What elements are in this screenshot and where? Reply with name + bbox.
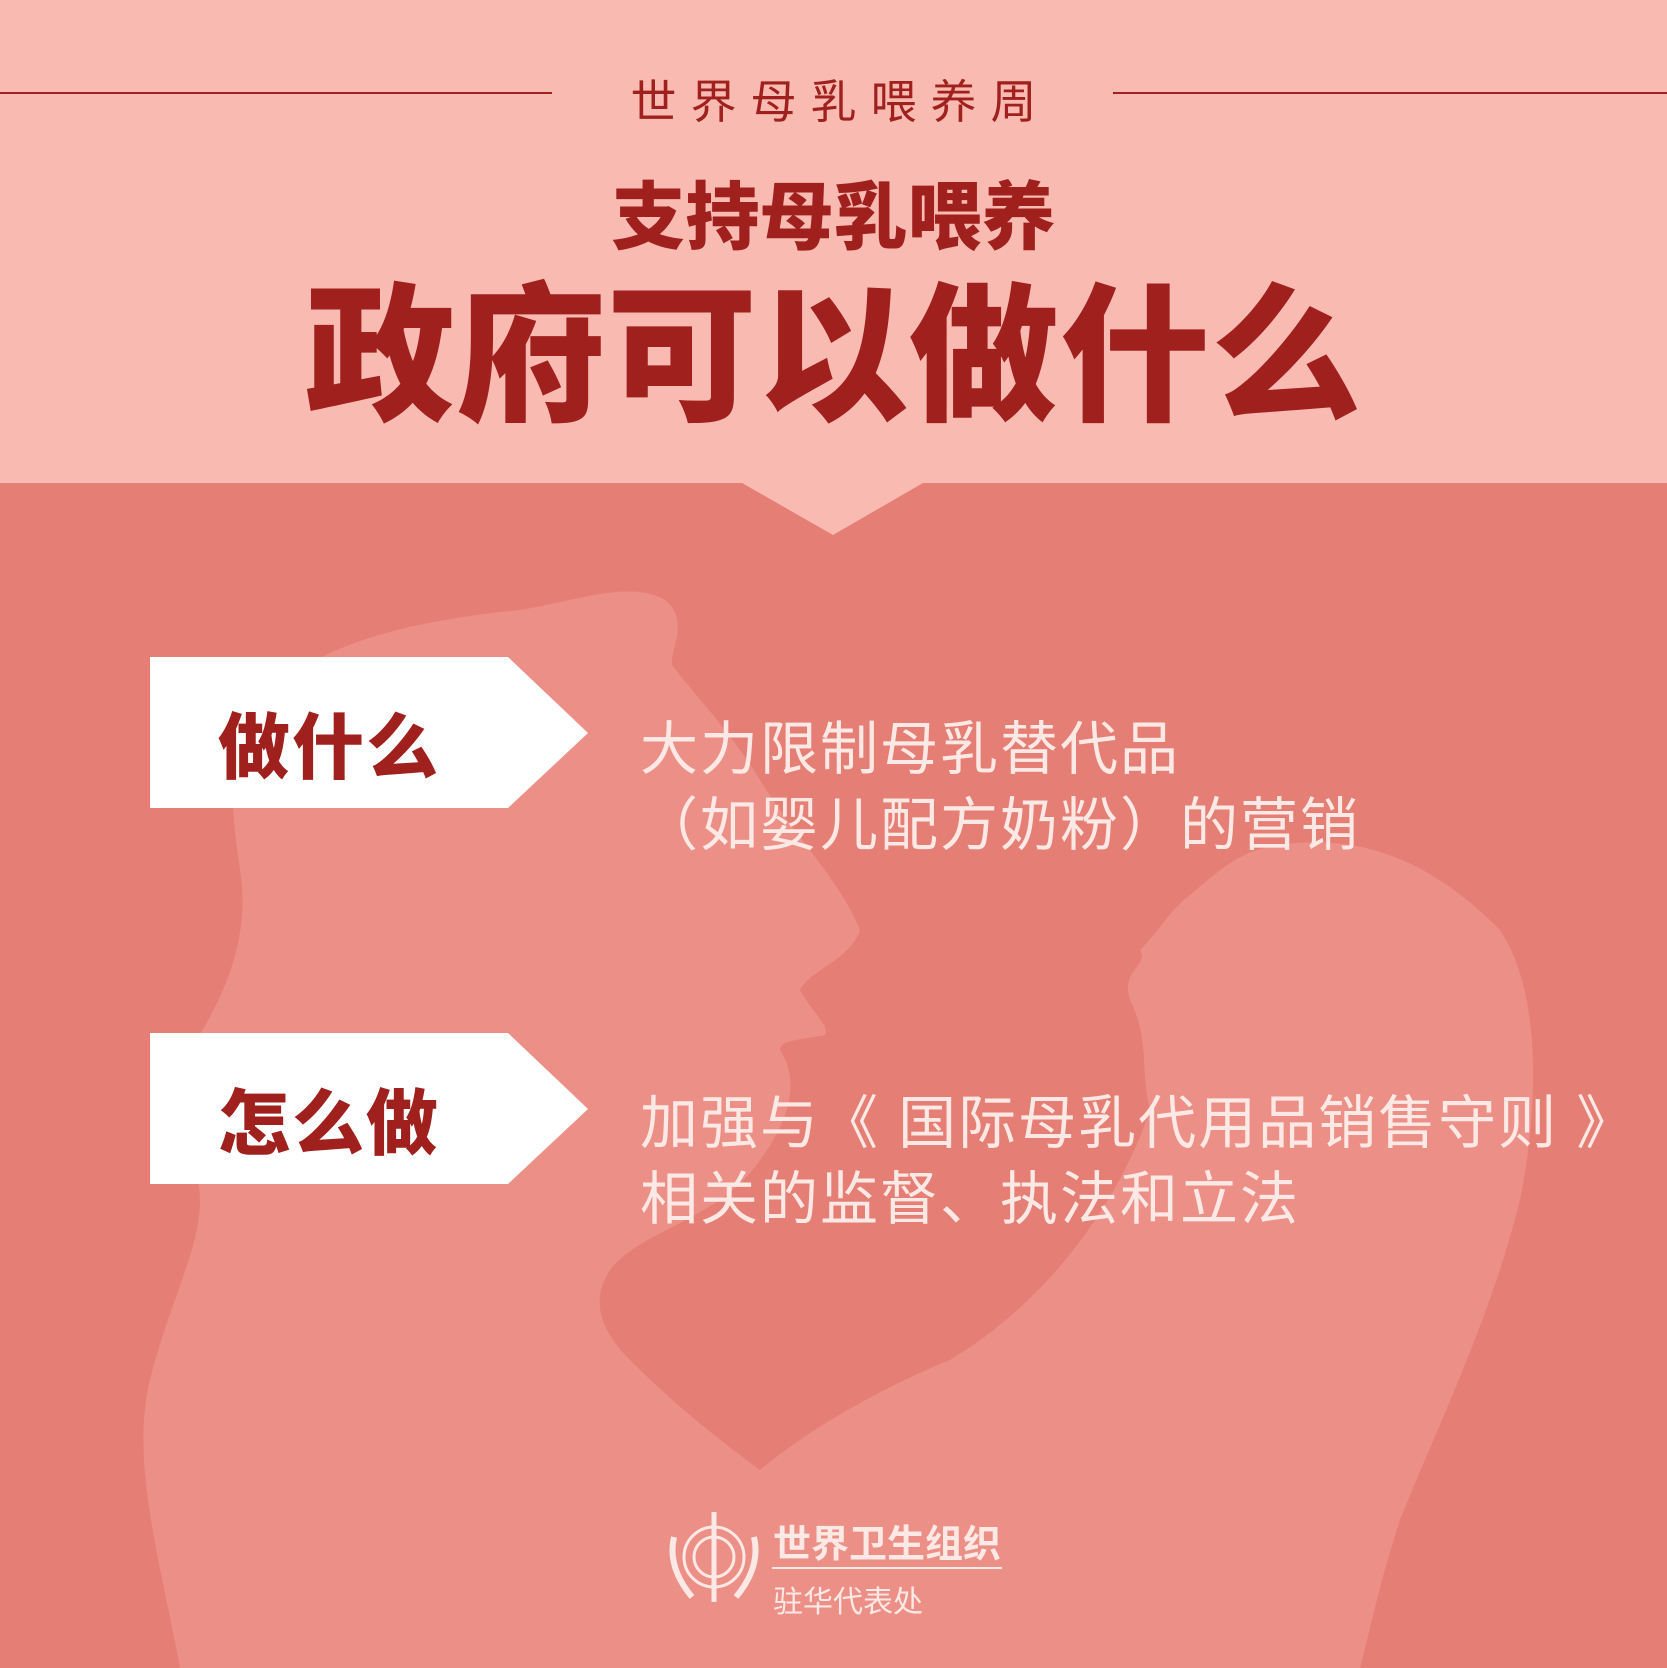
logo: 驻华代表处 xyxy=(773,1586,923,1619)
heading: 支持母乳喂养 xyxy=(612,176,1056,259)
text: 怎么做: 相关的监督、执法和立法 xyxy=(640,1167,1300,1232)
label: 怎么做: 怎么做 xyxy=(218,1085,440,1165)
icon: WHO emblem xyxy=(670,1512,758,1602)
label: 做什么 xyxy=(150,657,588,808)
text: 怎么做 xyxy=(640,1091,1636,1232)
main title: 政府可以做什么 xyxy=(305,273,1362,441)
text: 做什么: （如婴儿配方奶粉）的营销 xyxy=(640,793,1360,858)
logo xyxy=(670,1512,1002,1619)
label: 怎么做 xyxy=(150,1033,588,1184)
header band xyxy=(0,0,1667,535)
subtitle: 世界母乳喂养周 xyxy=(630,76,1050,128)
text: 做什么: 大力限制母乳替代品 xyxy=(640,717,1180,782)
text: WHO name: 世界卫生组织 xyxy=(773,1524,1001,1566)
text: 怎么做: 加强与《 国际母乳代用品销售守则 》 xyxy=(640,1091,1636,1156)
label: 做什么: 做什么 xyxy=(218,709,440,789)
text: 做什么 xyxy=(640,717,1360,858)
